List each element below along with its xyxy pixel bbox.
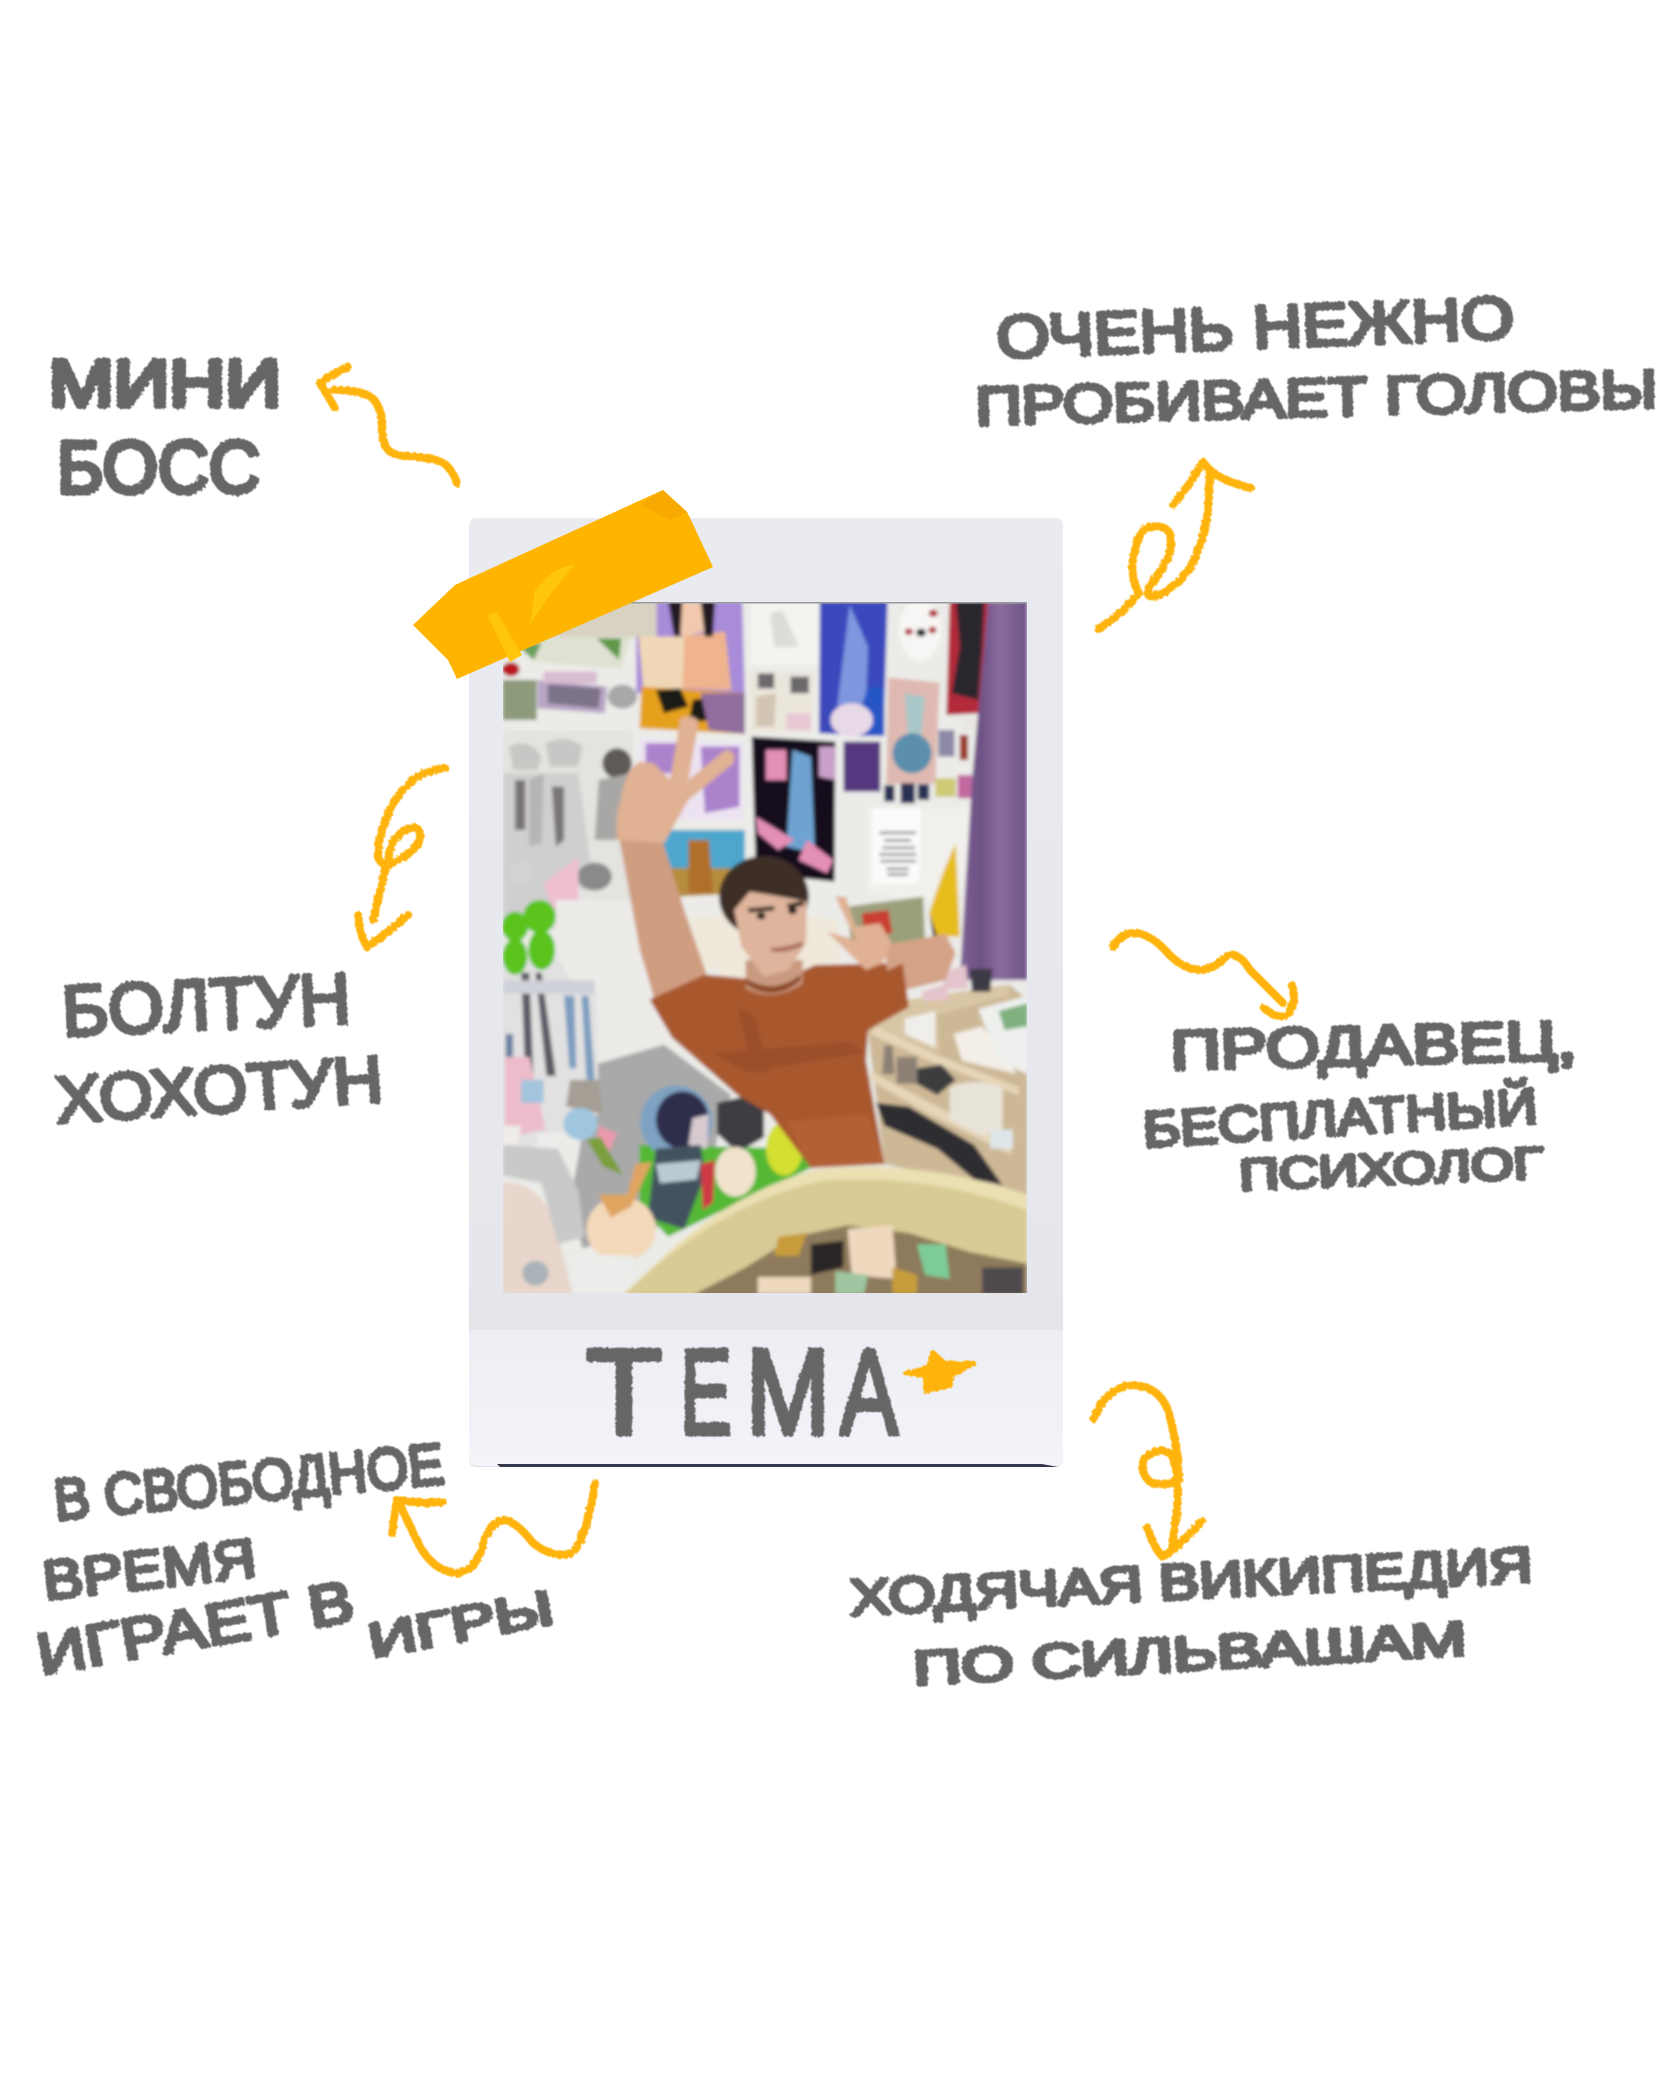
figurine: bird (766, 1122, 803, 1176)
arrow: to продавец (1113, 933, 1294, 1016)
arrow: to болтун (358, 768, 445, 947)
wall (503, 602, 1027, 1293)
arrow: to ходячая википедия (1094, 1385, 1202, 1557)
label: ходячая википедия по сильвашам: ХОДЯЧАЯ ВИКИПЕДИЯ (849, 1537, 1534, 1626)
label: продавец, бесплатный психолог (1141, 1008, 1577, 1200)
chair arm (876, 1103, 1003, 1185)
sleeve and collar (650, 963, 909, 1053)
green frog charms (502, 900, 556, 975)
bowl toys (695, 1225, 1027, 1298)
name: ТЕМА: Е (680, 1324, 732, 1460)
raised arm (617, 827, 707, 1007)
label: в свободное время играет в игры: ВРЕМЯ (39, 1526, 259, 1612)
t-shirt (672, 961, 900, 1166)
hair (719, 856, 809, 937)
bowl (619, 1167, 1027, 1298)
panel: polaroid card (413, 490, 1063, 1467)
label: очень нежно пробивает головы: ОЧЕНЬ НЕЖНО (995, 284, 1515, 371)
label: в свободное время играет в игры: В СВОБОДНОЕ (51, 1431, 446, 1533)
label: болтун хохотун (53, 959, 385, 1137)
label: продавец, бесплатный психолог: ПСИХОЛОГ (1238, 1139, 1544, 1200)
second hand (827, 897, 892, 970)
label: ходячая википедия по сильвашам (849, 1537, 1534, 1696)
label: в свободное время играет в игры: ИГРАЕТ В (32, 1569, 358, 1688)
man: head and arms (502, 716, 956, 1007)
figurine: penguin (717, 1097, 764, 1153)
yellow tape (413, 490, 713, 679)
label: в свободное время играет в игры: ИГРЫ (364, 1582, 558, 1669)
arrow: to мини босс (320, 367, 457, 483)
lower part of the photo (503, 900, 1027, 1298)
arrow: to в свободное время (392, 1483, 595, 1573)
label: очень нежно пробивает головы (975, 284, 1658, 437)
photo: man in a room full of posters and toys (502, 599, 1027, 1298)
neck (746, 960, 803, 995)
sketches and blurred key rings (509, 739, 582, 770)
label: болтун хохотун: БОЛТУН (60, 959, 352, 1052)
label: в свободное время играет в игры (32, 1431, 558, 1688)
label: мини босс: БОСС (57, 426, 260, 509)
table (570, 1045, 731, 1248)
keychains (521, 973, 556, 1076)
shelves (868, 984, 1027, 1195)
name: ТЕМА (586, 1324, 898, 1460)
label: мини босс (49, 346, 281, 509)
face (734, 892, 807, 977)
forearm (884, 934, 956, 990)
icon: yellow star (905, 1352, 974, 1392)
figure stand (640, 1145, 811, 1237)
blurred pale toy (503, 1183, 572, 1294)
polaroid bottom edge (497, 1464, 1058, 1467)
raised hand (617, 716, 734, 843)
label: мини босс: МИНИ (49, 346, 281, 420)
name: ТЕМА: А (840, 1324, 898, 1460)
label: болтун хохотун: ХОХОТУН (53, 1041, 385, 1137)
figurine: cat (715, 1147, 756, 1197)
figurine: dark haired (640, 1086, 712, 1158)
name: ТЕМА: М (746, 1324, 830, 1460)
polaroid bottom strip (469, 1330, 1063, 1466)
polaroid frame (469, 518, 1063, 1467)
label: ходячая википедия по сильвашам: ПО СИЛЬВАШАМ (912, 1613, 1468, 1696)
upper part of the photo (502, 599, 1027, 1000)
name: ТЕМА: Т (586, 1324, 662, 1460)
label: продавец, бесплатный психолог: БЕСПЛАТНЫЙ (1141, 1077, 1539, 1158)
label: продавец, бесплатный психолог: ПРОДАВЕЦ, (1170, 1008, 1577, 1082)
arrow: to очень нежно (1098, 462, 1251, 629)
photo top edge (503, 602, 1027, 604)
rabbit (586, 1197, 656, 1262)
label: очень нежно пробивает головы: ПРОБИВАЕТ ГОЛОВЫ (975, 359, 1658, 437)
